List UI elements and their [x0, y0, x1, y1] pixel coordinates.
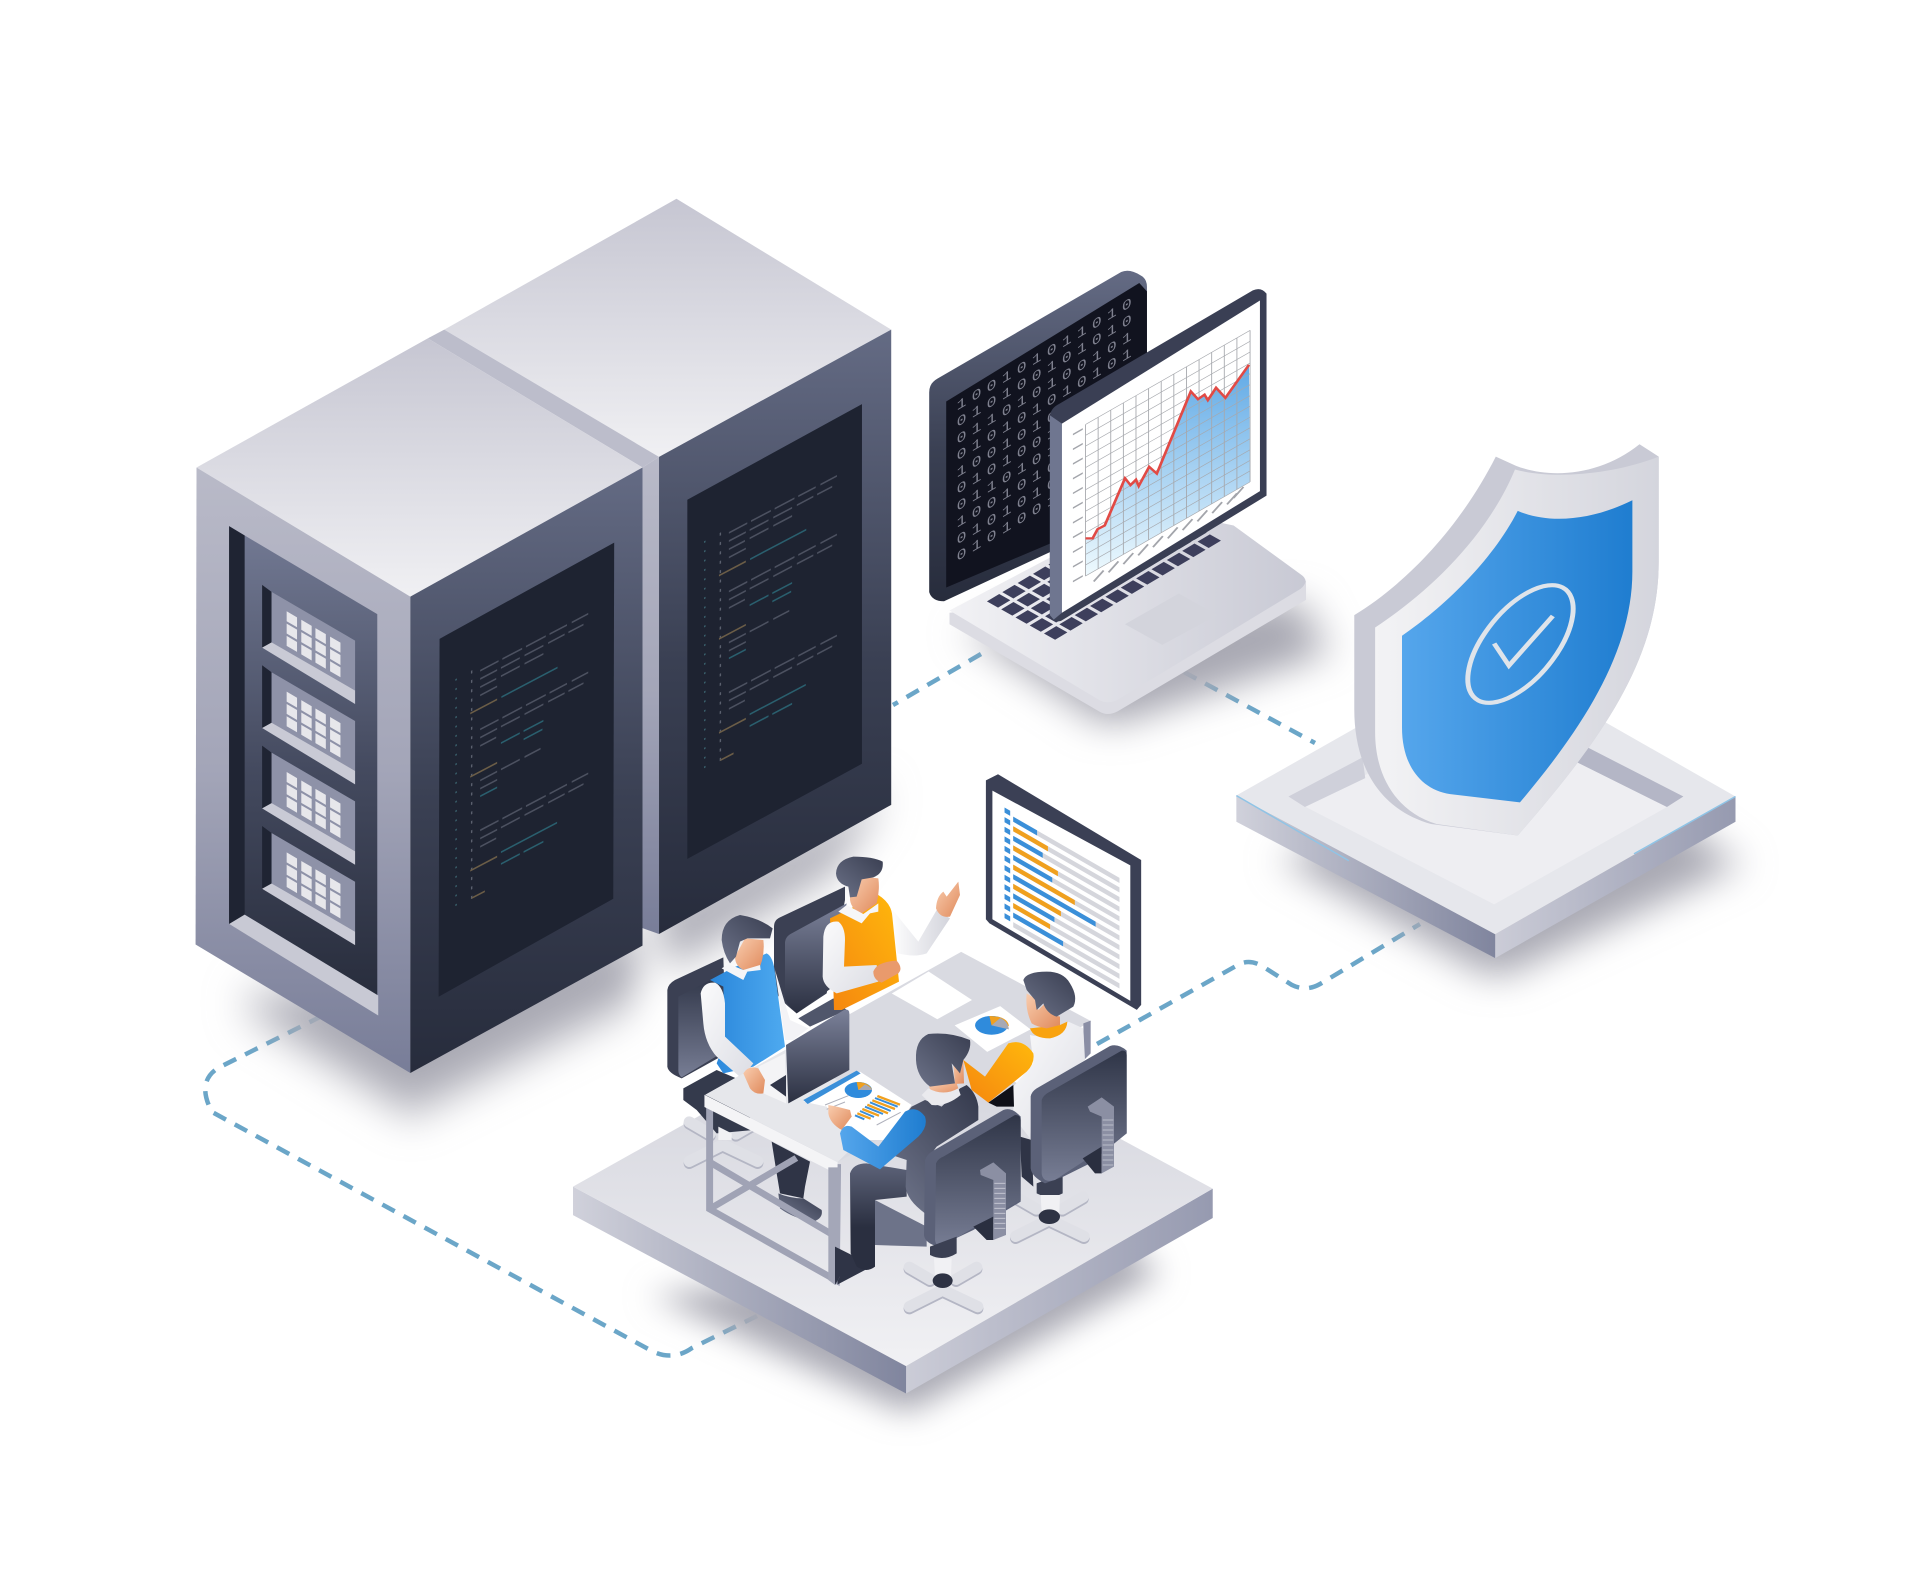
report text lines	[825, 1096, 901, 1125]
rack gap top	[428, 330, 659, 467]
rack screen	[687, 404, 862, 859]
rack right face	[410, 467, 643, 1073]
rack code lines	[705, 471, 837, 773]
laptop	[929, 271, 1306, 714]
table laptop and report	[743, 1010, 912, 1140]
connector: server to meeting room	[205, 1016, 757, 1356]
right side people and chairs	[963, 972, 1127, 1224]
base recess left	[1288, 757, 1365, 807]
chart area	[1086, 365, 1250, 576]
chair ring	[1039, 1209, 1060, 1224]
platform	[573, 1012, 1213, 1394]
blue sleeve	[840, 1109, 926, 1169]
raised arm	[890, 907, 950, 956]
back screen display	[946, 283, 1147, 588]
table frame	[710, 1101, 838, 1280]
base recess right	[1576, 746, 1683, 807]
drive slot 1	[262, 585, 355, 704]
sleeve	[963, 1042, 1034, 1103]
pie chart	[845, 1082, 872, 1098]
arm	[823, 922, 878, 993]
table leg: right front	[828, 1167, 840, 1285]
connector: meeting room to shield	[1097, 924, 1420, 1044]
shirt	[1013, 1022, 1085, 1138]
table light corner	[705, 1050, 890, 1162]
server racks	[196, 199, 891, 1113]
binary digits: 010100101010	[957, 309, 1137, 432]
chair seat	[683, 1070, 753, 1133]
seat bands	[875, 1200, 927, 1247]
person: yellow sleeve	[963, 972, 1091, 1138]
chair shell	[774, 887, 845, 1013]
bar chart	[857, 1096, 900, 1119]
chair shell	[667, 957, 727, 1078]
face	[1026, 993, 1060, 1028]
report sheet	[955, 1006, 1031, 1052]
rack right face	[659, 330, 891, 934]
binary digits: 100101010010	[957, 409, 1137, 533]
armrest hatch	[1103, 1120, 1113, 1165]
line chart	[1073, 330, 1250, 582]
drive slot 2	[262, 665, 355, 784]
binary digits	[957, 292, 1137, 566]
raised hand	[936, 882, 960, 917]
chair panel	[785, 903, 847, 1013]
back chair	[774, 887, 847, 1027]
laptop keys	[770, 1075, 786, 1097]
report sheet	[803, 1072, 912, 1140]
person: orange vest	[823, 857, 960, 1010]
shadow: shield base	[1283, 819, 1738, 980]
laptop keyboard	[992, 503, 1218, 637]
bar chart blue	[855, 1098, 898, 1119]
table connector	[835, 1247, 875, 1285]
binary digits: 100101011010	[957, 292, 1137, 416]
chair shell	[924, 1109, 1021, 1247]
platform right side	[906, 1189, 1213, 1394]
star base: left chair	[689, 1122, 758, 1163]
rack: back server	[428, 199, 891, 934]
star base: right chair	[1016, 1197, 1084, 1238]
shadow: laptop	[965, 599, 1327, 728]
column dark	[930, 1237, 957, 1258]
rack screen	[439, 543, 614, 997]
base right side	[1495, 796, 1735, 958]
platform left side	[573, 1187, 906, 1394]
front person and chair	[828, 1163, 978, 1309]
laptop and shield	[929, 271, 1738, 980]
table edge	[704, 1095, 838, 1174]
base blue edge	[1236, 796, 1735, 861]
binary digits: 011010100101	[957, 326, 1137, 449]
rack top	[197, 338, 643, 597]
chart red line	[1086, 365, 1249, 538]
base left side	[1236, 796, 1495, 958]
front screen display	[1062, 301, 1260, 613]
front chair	[924, 1109, 1021, 1247]
back screen frame	[929, 271, 1147, 601]
forearm hand	[873, 961, 900, 983]
armrest hatch	[994, 1183, 1005, 1228]
wall monitor: bar chart	[986, 774, 1141, 1010]
report with pie	[955, 1006, 1031, 1052]
shield front	[1375, 457, 1659, 835]
front chair column	[930, 1237, 957, 1288]
shield depth	[1354, 444, 1659, 835]
face	[735, 938, 764, 971]
chair seat	[798, 998, 847, 1027]
rack recess	[229, 526, 377, 1013]
pie gray slice	[858, 1084, 872, 1090]
dark gap	[988, 1085, 1014, 1107]
hair	[836, 857, 883, 897]
rack code lines	[456, 609, 588, 910]
star base: front chair	[909, 1267, 978, 1309]
person: blue vest	[701, 915, 808, 1078]
recess lip	[229, 915, 378, 1016]
shadow: platform	[651, 1242, 1159, 1413]
drive slot 3	[262, 746, 355, 865]
arm	[701, 983, 753, 1078]
ear	[953, 1060, 964, 1084]
right chair	[1020, 1045, 1127, 1224]
back row people and chairs	[667, 857, 960, 1140]
blue vest legs and foot	[772, 1142, 822, 1222]
armrest bracket	[1083, 1147, 1102, 1173]
armrest bracket	[973, 1217, 993, 1240]
chart grid	[1086, 330, 1250, 576]
laptop lid	[786, 1010, 849, 1103]
hand: front person	[828, 1105, 852, 1130]
connector: laptop to shield	[1184, 672, 1315, 743]
collar	[722, 964, 761, 980]
chair bases: left and right	[689, 1122, 1084, 1238]
binary digits: 010101010101	[957, 342, 1137, 466]
leg	[772, 1142, 810, 1198]
monitor display	[992, 791, 1130, 1001]
far arm	[775, 970, 808, 1040]
platform top	[573, 1012, 1213, 1366]
binary digits: 010100101010	[957, 443, 1137, 566]
bars	[1005, 810, 1119, 986]
column ring	[933, 1273, 953, 1288]
monitor frame	[986, 774, 1141, 1010]
armrest	[980, 1162, 1006, 1240]
neck	[928, 1083, 958, 1095]
meeting room	[573, 774, 1213, 1413]
face	[850, 877, 879, 913]
collar	[1030, 1022, 1067, 1038]
shadow: server racks	[232, 790, 891, 1113]
drive slot 4	[262, 826, 355, 945]
collar	[922, 1088, 961, 1105]
shield	[1354, 444, 1659, 835]
front screen frame	[1050, 289, 1267, 621]
armrest	[1088, 1097, 1114, 1173]
pie chart	[975, 1016, 1008, 1035]
shield base	[1236, 654, 1735, 958]
chair legs	[1020, 1137, 1033, 1187]
shield blue panel	[1402, 500, 1632, 802]
chart y ticks	[1073, 429, 1083, 582]
chair panel	[678, 973, 727, 1077]
binary digits: 100101010010	[957, 359, 1137, 483]
chair column white	[1041, 1195, 1060, 1213]
chair edge	[1083, 1021, 1091, 1060]
laptop base side	[949, 581, 1306, 714]
vest	[710, 953, 785, 1073]
base top	[1236, 654, 1735, 934]
base inner top	[1305, 709, 1667, 904]
chair panel	[935, 1115, 1021, 1247]
binary digits: 010101001010	[957, 426, 1137, 550]
laptop trackpad	[1125, 593, 1217, 645]
binary digits: 010100101010	[957, 376, 1137, 499]
table top	[705, 952, 1091, 1162]
front screen side bevel	[1050, 415, 1062, 620]
rack gap side	[643, 457, 659, 934]
front person upper	[840, 1033, 1021, 1247]
hair	[916, 1033, 970, 1087]
laptop palm rest	[758, 1053, 786, 1103]
column white	[934, 1258, 952, 1276]
chair shell	[1031, 1045, 1127, 1183]
hand: blue vest	[743, 1067, 765, 1094]
rack left face	[196, 467, 410, 1073]
foot	[778, 1193, 822, 1222]
leg	[850, 1163, 907, 1270]
chair panel	[1042, 1051, 1127, 1181]
connector: server to laptop	[893, 654, 981, 705]
chair column	[1037, 1173, 1063, 1197]
recess dark strip	[229, 526, 245, 924]
binary digits: 011010101010	[957, 393, 1137, 516]
left chair	[667, 957, 753, 1140]
chair column	[718, 1127, 732, 1140]
icon: check circle	[1447, 571, 1594, 717]
table	[704, 952, 1091, 1285]
rack: front server	[196, 338, 643, 1073]
hair	[1023, 972, 1075, 1017]
laptop deck	[949, 507, 1305, 702]
vest	[830, 895, 899, 1010]
jacket	[877, 1085, 978, 1213]
chart x ticks	[1094, 487, 1243, 582]
collar	[838, 903, 878, 923]
platform and wall monitor	[573, 774, 1213, 1413]
pie orange slice	[857, 1082, 872, 1090]
white paper	[892, 971, 972, 1019]
table corner	[838, 1260, 872, 1285]
pie base	[845, 1082, 872, 1098]
rack top	[444, 199, 891, 457]
report header	[803, 1071, 861, 1104]
hair	[722, 915, 773, 963]
